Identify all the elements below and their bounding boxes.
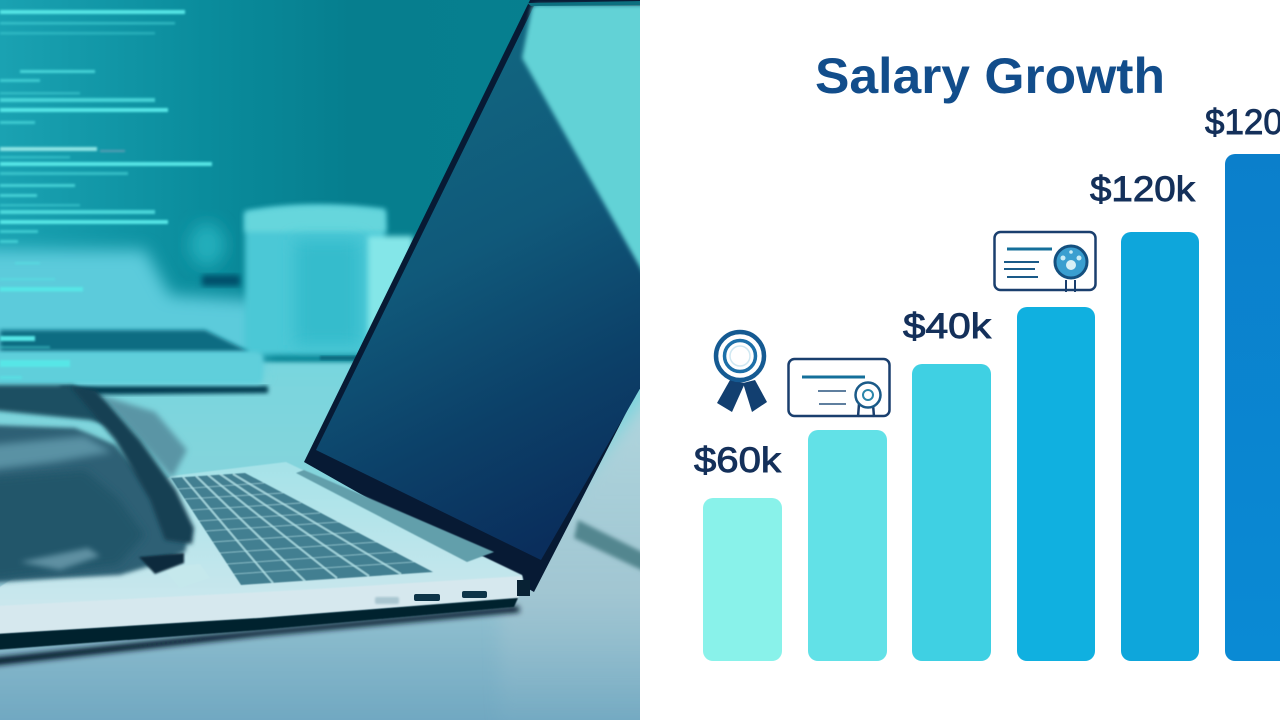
blurred notebook [0,330,268,395]
panel: salary chart [640,0,1280,720]
laptop lid and screen [304,0,645,592]
icon: certificate 2 [994,232,1096,292]
right-hand desk behind laptop [504,394,640,680]
ports [414,594,440,601]
bar 3 [912,364,991,661]
label: $60k: $60k [694,441,782,480]
trackpad [163,564,210,588]
bar 2 [808,430,887,661]
hands on keyboard [0,385,194,582]
code lines on background display [0,10,212,393]
laptop base [0,462,530,666]
blurred coffee cup [189,205,413,360]
label: $120k: $120k [1090,170,1196,209]
blurred desk surface [0,250,650,720]
bar 4 [1017,307,1095,661]
icon: certificate 1 [788,359,890,417]
icon: award ribbon [716,332,767,412]
keyboard [171,473,433,585]
panel: laptop photo [0,0,660,720]
bar 6 [1225,154,1280,661]
hinge strip [296,470,494,562]
bar 1 [703,498,782,661]
label: $40k: $40k [903,307,992,346]
title: Salary Growth [815,48,1165,104]
bar 5 [1121,232,1199,661]
